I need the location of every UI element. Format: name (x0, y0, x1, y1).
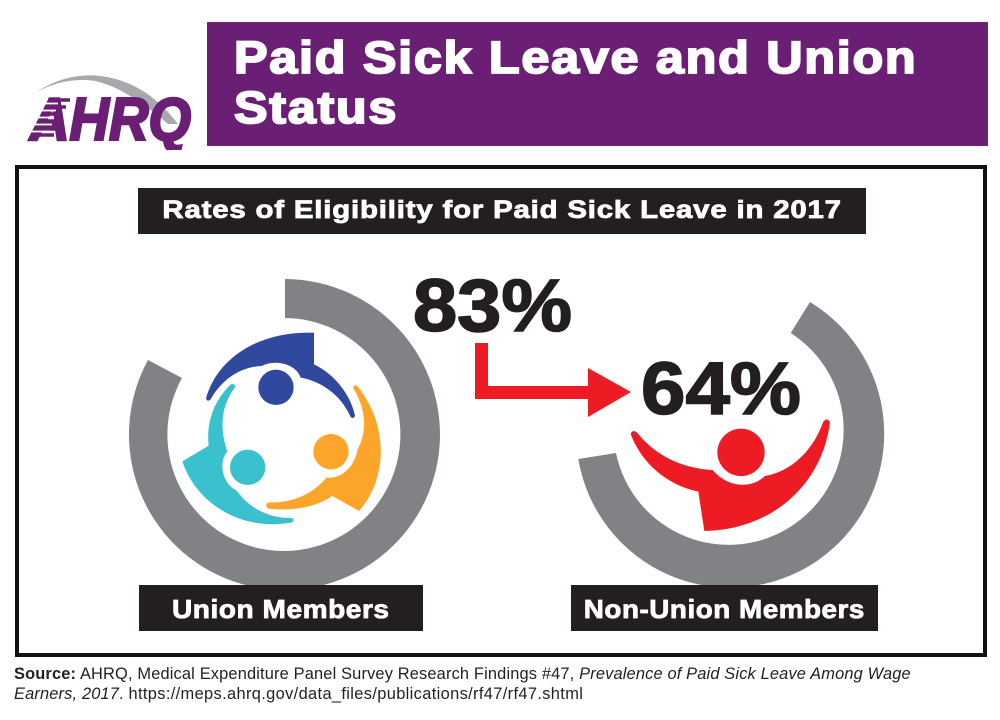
label: non-union members (571, 585, 878, 631)
stat: 83%: 83% (413, 264, 572, 347)
teal person (182, 384, 294, 524)
label: union members (139, 585, 423, 631)
icon: union members group (182, 333, 381, 524)
source note: Source: AHRQ, Medical Expenditure Panel Survey Research Findings #47, Prevalence of Paid Sick Leave Among Wage (14, 665, 911, 683)
label: non-union members: Non-Union Members (584, 594, 865, 624)
icon: non-union member (631, 419, 830, 531)
logo: AHRQ (26, 75, 192, 150)
ring: union members 83% (129, 279, 440, 590)
label: union members: Union Members (172, 594, 390, 624)
source note: Earners, 2017. https://meps.ahrq.gov/data_files/publications/rf47/rf47.shtml (14, 685, 583, 703)
arrow: 83% to 64% (475, 343, 631, 417)
logo arc (37, 75, 178, 124)
heading: rates of eligibility: Rates of Eligibility for Paid Sick Leave in 2017 (162, 196, 842, 224)
logo stepped stripes (33, 100, 70, 135)
panel: chart frame (15, 165, 987, 657)
ring: non-union members 64% (578, 302, 884, 588)
blue person (206, 333, 355, 418)
stat: 64%: 64% (641, 347, 801, 430)
title banner (207, 22, 988, 146)
logo stripe gaps (28, 104, 58, 132)
heading: rates of eligibility (138, 188, 866, 234)
orange person (266, 385, 381, 511)
source note (14, 665, 911, 703)
title: Paid Sick Leave and Union Status (234, 32, 917, 133)
